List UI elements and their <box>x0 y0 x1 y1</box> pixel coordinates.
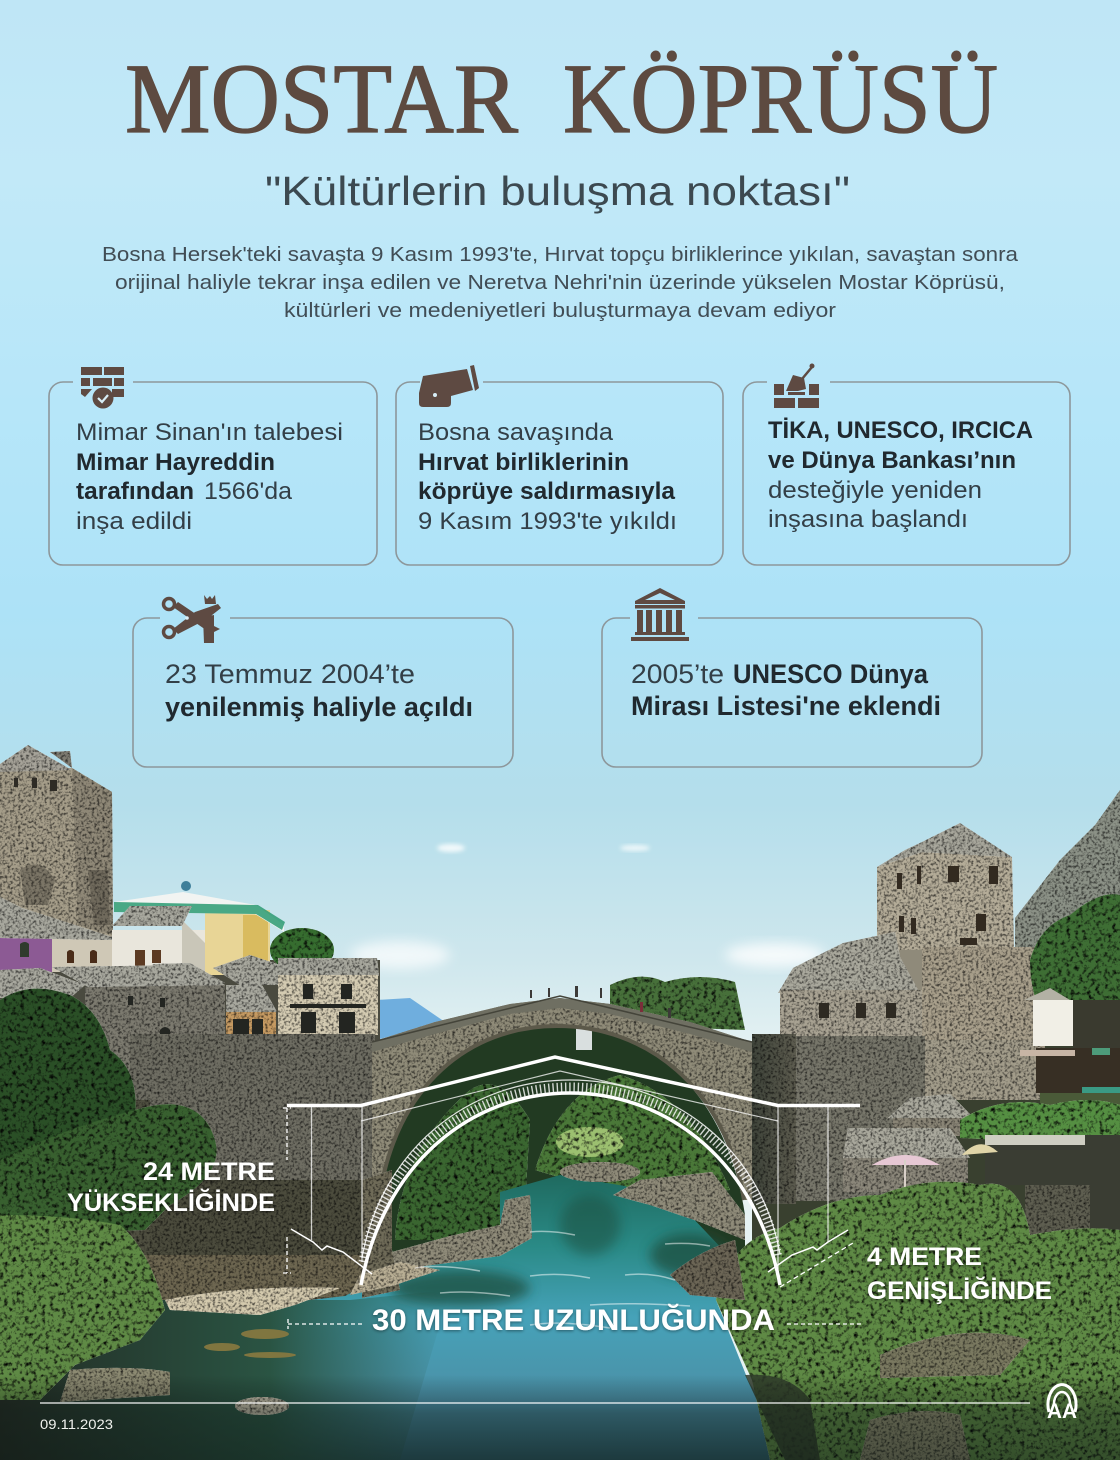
intro paragraph <box>102 243 1019 322</box>
river <box>0 1175 795 1460</box>
terrace wall and umbrella <box>872 1135 1120 1235</box>
card text: 23 Temmuz 2004’te <box>165 659 415 689</box>
card text: TİKA, UNESCO, IRCICA <box>768 417 1033 444</box>
card text <box>631 659 941 721</box>
card text: Hırvat birliklerinin <box>418 449 629 476</box>
label: height: 24 METRE <box>143 1158 275 1186</box>
view through the arch <box>379 1026 745 1290</box>
arch intrados <box>361 1093 780 1285</box>
label: width <box>867 1243 1052 1305</box>
logo: AA <box>1047 1385 1077 1423</box>
left tower windows <box>14 778 110 925</box>
right contour line <box>768 1230 848 1272</box>
card text: Mimar Hayreddin <box>76 449 275 476</box>
lower right houses <box>843 1094 972 1192</box>
subtitle: "Kültürlerin buluşma noktası" <box>265 168 850 214</box>
vertical guides <box>312 1107 828 1270</box>
stone bridge <box>372 996 752 1200</box>
card: Bosna savaşı <box>396 365 723 565</box>
bottom dark fade <box>0 1375 1120 1460</box>
icon: temple <box>631 588 689 641</box>
date: 09.11.2023 <box>40 1417 113 1432</box>
card text: Mimar Sinan'ın talebesi <box>76 419 343 446</box>
right big wall <box>752 1034 1040 1204</box>
left town walls <box>0 881 285 975</box>
left greenery <box>0 989 217 1400</box>
left town houses <box>85 975 378 1100</box>
card: yeniden inşa <box>743 364 1070 565</box>
card text: tarafından <box>76 478 194 505</box>
footer line <box>40 1402 1030 1404</box>
people on bridge <box>530 986 671 1018</box>
river bank rocks <box>204 1329 296 1358</box>
left rocky banks <box>60 1288 340 1415</box>
card text: inşasına başlandı <box>768 506 968 533</box>
card: Mimar Hayreddin <box>49 367 377 565</box>
bridge dimension diagram <box>283 1057 862 1329</box>
card text: Mirası Listesi'ne eklendi <box>631 691 941 721</box>
logo: AA: AA <box>1047 1400 1077 1423</box>
height dimension <box>283 1108 291 1273</box>
distant mountains <box>376 790 1120 1040</box>
card: açılış <box>133 595 513 767</box>
left pier <box>362 1170 400 1298</box>
icon: trowel and bricks <box>774 364 819 408</box>
river rocks in arch <box>392 1162 745 1270</box>
length dimension <box>288 1319 862 1329</box>
icon: cannon <box>419 365 479 407</box>
bridge lower deck line <box>361 1071 778 1121</box>
right dark bank rock <box>670 1240 1030 1460</box>
right tower house <box>778 932 922 1038</box>
label: width: 4 METRE <box>867 1243 982 1271</box>
label: height: YÜKSEKLİĞİNDE <box>67 1188 275 1217</box>
card text <box>76 419 343 535</box>
card text: 2005’te <box>631 659 724 689</box>
water ripples <box>415 1231 710 1328</box>
card: UNESCO <box>602 588 982 767</box>
card text <box>418 419 677 535</box>
pier rocks <box>350 1262 440 1295</box>
right tree <box>1030 894 1120 1040</box>
card text: inşa edildi <box>76 508 192 535</box>
width dimension <box>780 1243 853 1287</box>
far trees behind bridge <box>270 928 745 1030</box>
label: width: GENİŞLİĞİNDE <box>867 1276 1052 1305</box>
label: height <box>67 1158 275 1217</box>
card text: UNESCO Dünya <box>733 659 929 689</box>
dark left water <box>0 1290 450 1460</box>
card text: desteğiyle yeniden <box>768 477 982 504</box>
label: length: 30 METRE UZUNLUĞUNDA <box>372 1303 775 1337</box>
left town roofs <box>0 897 379 1012</box>
bridge deck outline <box>287 1057 860 1106</box>
clouds <box>350 844 825 969</box>
right shops <box>1020 988 1120 1105</box>
intro paragraph: kültürleri ve medeniyetleri buluşturmaya devam ediyor <box>284 299 836 322</box>
left wall and abutment <box>90 1034 390 1300</box>
icon: brick wall with check <box>81 367 124 408</box>
card text: 9 Kasım 1993'te yıkıldı <box>418 508 677 535</box>
title: MOSTAR <box>125 43 518 154</box>
left tower <box>0 745 113 945</box>
card text: ve Dünya Bankası’nın <box>768 447 1016 474</box>
title: KÖPRÜSÜ <box>563 43 998 154</box>
card text <box>165 659 473 722</box>
intro paragraph: orijinal haliyle tekrar inşa edilen ve Neretva Nehri'nin üzerinde yükselen Mostar Köprüsü, <box>115 271 1005 294</box>
photo scene: Mostar bridge and old town <box>0 745 1120 1460</box>
right tower <box>877 823 1045 1097</box>
title <box>125 43 998 154</box>
vine terrace <box>960 1100 1120 1145</box>
water reflections <box>390 1195 730 1306</box>
intro paragraph: Bosna Hersek'teki savaşta 9 Kasım 1993'te, Hırvat topçu birliklerince yıkılan, savaştan sonra <box>102 243 1019 266</box>
arch hatched band <box>363 1087 778 1262</box>
base ground behind town <box>0 945 1120 1300</box>
right greenery <box>716 1182 1120 1460</box>
right tower windows <box>897 866 998 945</box>
card text <box>768 417 1033 533</box>
icon: scissors and ribbon <box>164 595 221 643</box>
card text: Bosna savaşında <box>418 419 614 446</box>
card text: köprüye saldırmasıyla <box>418 478 676 505</box>
card text: 1566'da <box>204 478 293 505</box>
card text: yenilenmiş haliyle açıldı <box>165 692 473 722</box>
left contour line <box>291 1229 372 1274</box>
